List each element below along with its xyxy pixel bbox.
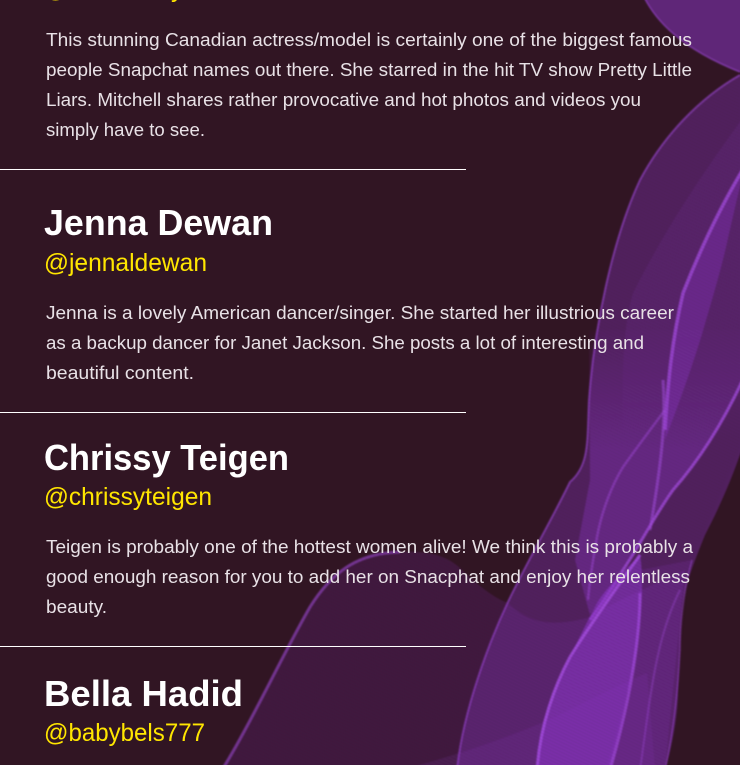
profile: Chrissy Teigen: @chrissyteigen [44,483,212,511]
profile: Jenna Dewan [44,202,674,383]
divider [0,169,466,170]
profile: Bella Hadid: @babybels777 [44,719,205,747]
profile: Chrissy Teigen [44,437,694,617]
mesh texture [222,75,740,765]
profile: Chrissy Teigen: good enough reason for you to add her on Snacphat and enjoy her relentless [46,567,690,587]
text block: top profile description: Liars. Mitchell shares rather provocative and hot photos and videos you [46,90,641,110]
divider [0,646,466,647]
profile: Bella Hadid: Bella Hadid [44,673,243,714]
profile: Jenna Dewan: @jennaldewan [44,249,207,277]
profile: Chrissy Teigen: beauty. [46,597,107,617]
top corner ribbon [643,0,740,74]
decorative purple ribbons [222,0,740,765]
text block: top profile description: simply have to see. [46,120,205,140]
profile: Jenna Dewan: beautiful content. [46,363,194,383]
cut-off handle: top profile [44,0,184,3]
text block: top profile description [46,30,692,140]
profile: Jenna Dewan: as a backup dancer for Janet Jackson. She posts a lot of interesting and [46,333,644,353]
profile: Chrissy Teigen: Chrissy Teigen [44,437,289,478]
profile: Bella Hadid [44,673,243,747]
text block: top profile description: This stunning Canadian actress/model is certainly one of the biggest famous [46,30,692,50]
diagonal band [575,330,740,615]
profile: Jenna Dewan: Jenna Dewan [44,202,273,243]
inner band, upper right [623,115,740,440]
lower-left ribbon [222,552,685,765]
lower bright ribbon [537,555,642,765]
bright lens [665,165,740,440]
main ribbon mass [457,72,740,765]
right-hand ribbon edge [665,560,692,765]
bottom sweep [400,673,655,765]
text block: top profile description: people Snapchat names out there. She starred in the hit TV show Pretty Little [46,60,692,80]
divider [0,412,466,413]
profile: Chrissy Teigen: Teigen is probably one of the hottest women alive! We think this is probably a [46,537,694,557]
right lower band [605,560,692,765]
profile: Jenna Dewan: Jenna is a lovely American dancer/singer. She started her illustrious career [46,303,674,323]
